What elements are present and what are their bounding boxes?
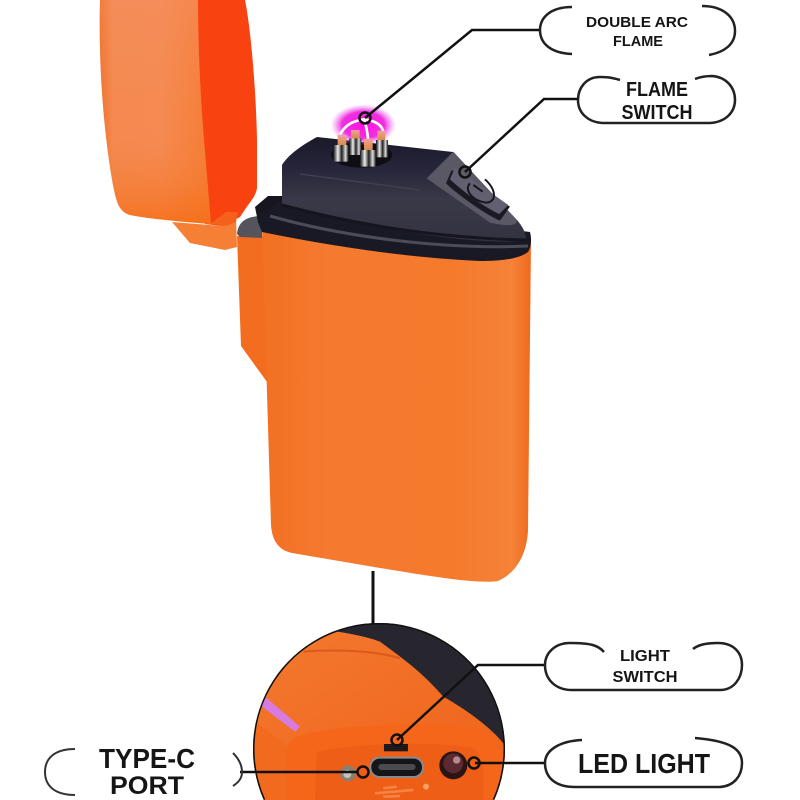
connector to magnifier	[372, 571, 374, 624]
type-c port	[369, 757, 424, 778]
anchor dot	[360, 112, 370, 124]
led lens	[439, 751, 467, 779]
magnifier ring	[253, 623, 505, 800]
bubble outline	[545, 643, 742, 690]
head shell	[282, 137, 526, 242]
label: FLAME	[626, 79, 688, 101]
lighter lid	[100, 0, 257, 250]
bubble outline	[578, 76, 735, 123]
callout: led light	[468, 738, 742, 787]
label	[586, 14, 688, 50]
arc glow	[331, 104, 396, 146]
pin hole	[340, 765, 356, 781]
body front face	[262, 228, 531, 582]
rim band	[259, 200, 531, 261]
anchor dot	[460, 166, 470, 178]
rim highlights	[270, 216, 528, 247]
bubble outline	[545, 738, 742, 787]
bottom lip	[253, 722, 287, 800]
port recess	[316, 747, 476, 770]
label: TYPE-C	[99, 743, 195, 774]
label	[612, 648, 678, 686]
lid inner red wall	[195, 0, 257, 226]
hinge collar	[237, 216, 262, 238]
label	[99, 743, 195, 800]
lid front face	[100, 0, 211, 224]
callout: double arc flame	[360, 6, 735, 124]
power button	[446, 167, 510, 221]
electrodes	[333, 130, 388, 167]
label: LED LIGHT	[578, 748, 710, 779]
anchor dot	[358, 766, 368, 778]
leader line	[465, 99, 578, 172]
electrode well	[331, 142, 392, 168]
body side panel	[237, 236, 267, 382]
label	[622, 79, 692, 124]
callout: light switch	[392, 643, 742, 746]
label: SWITCH	[622, 102, 692, 124]
anchor dot	[468, 758, 480, 768]
bubble outline	[540, 6, 735, 55]
orange body	[253, 631, 505, 800]
purple reflection	[260, 697, 300, 732]
label: PORT	[110, 772, 184, 800]
leader line	[475, 762, 545, 764]
bubble outline	[45, 749, 242, 795]
leader line	[397, 665, 545, 740]
magnified bottom detail	[253, 623, 505, 800]
label: FLAME	[613, 33, 663, 50]
dark background	[253, 623, 505, 800]
callout: flame switch	[460, 76, 735, 178]
lighter body	[237, 196, 531, 582]
label: LIGHT	[620, 648, 670, 665]
leader line	[365, 30, 540, 118]
usb mark	[375, 787, 413, 797]
anchor dot	[392, 734, 402, 746]
label: DOUBLE ARC	[586, 14, 688, 31]
light switch slot	[384, 744, 408, 751]
dark flame head	[259, 104, 531, 261]
lid hinge tab	[172, 218, 237, 250]
leader line	[240, 771, 358, 773]
callout: type-c port	[45, 743, 368, 800]
label: SWITCH	[612, 669, 678, 686]
switch panel	[427, 152, 517, 225]
